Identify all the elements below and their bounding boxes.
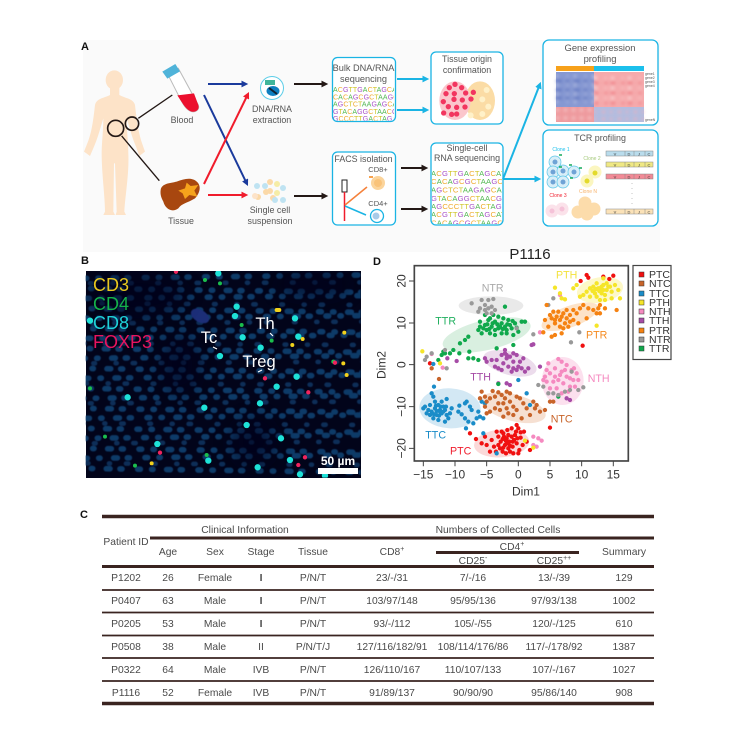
chart title: P1116	[509, 246, 551, 263]
icon: tissue cells	[439, 81, 495, 120]
panel: single-cell sequencing	[431, 143, 508, 228]
axes: −10	[394, 396, 408, 417]
row P0508: 38	[162, 642, 174, 653]
TCR segment labels: D	[628, 162, 631, 168]
label: tissue: Tissue	[168, 216, 194, 226]
label: extraction: extraction	[253, 115, 291, 125]
table header: Summary	[602, 547, 647, 558]
legend	[633, 266, 671, 360]
scatter plot	[375, 266, 628, 499]
TCR segment labels: C	[648, 152, 651, 156]
sequence text: ACGTTGACTAGCAT	[333, 87, 401, 94]
sequence text: CACAGCGCTAAGCT	[333, 94, 403, 101]
panel: single-cell sequencing: RNA sequencing	[434, 153, 500, 163]
NTC points	[432, 368, 553, 418]
sequence text: GTACAGGCTAACGC	[333, 109, 403, 116]
table header	[103, 525, 647, 567]
row P0322: 107/-/167	[532, 665, 576, 676]
TCR segment labels: D	[628, 152, 631, 156]
PTC points	[430, 275, 613, 453]
table header: CD8	[380, 547, 400, 558]
sequence text: AGCTCTAAGAGCAG	[431, 186, 508, 194]
channel legend: FOXP3	[93, 332, 152, 352]
axes: Dim1	[512, 485, 540, 499]
row P1202: 23/-/31	[376, 573, 408, 584]
arrows: to profiling	[503, 84, 540, 179]
legend: PTC	[649, 269, 670, 281]
clone N: Clone N	[579, 189, 597, 195]
TCR segment labels	[614, 152, 651, 214]
row P0508	[111, 642, 636, 653]
panel: gene expression profiling: profiling	[584, 53, 616, 64]
cluster labels: TTC	[425, 430, 446, 442]
cell labels: Tc	[201, 329, 217, 347]
channel legend: CD3	[93, 275, 129, 295]
cluster labels: NTR	[482, 282, 504, 294]
row P0322: Male	[204, 665, 226, 676]
label: suspension: suspension	[248, 216, 293, 226]
panel A letter: A	[81, 41, 89, 53]
cluster labels: PTR	[586, 330, 608, 342]
sequence text: ACGTTGACTAGCAT	[431, 210, 506, 219]
cluster labels: PTC	[450, 446, 472, 458]
panel: FACS isolation	[332, 152, 396, 225]
legend: TTC	[649, 288, 670, 300]
row P0322: 110/107/133	[445, 665, 502, 676]
scale bar	[318, 454, 358, 474]
row P1116: 52	[162, 688, 174, 699]
axes: 10	[394, 316, 408, 330]
axes: Dim2	[375, 351, 389, 379]
row P0322: P0322	[111, 665, 141, 676]
row P1116: 91/89/137	[369, 688, 415, 699]
panel: tissue origin confirmation	[431, 52, 503, 124]
panel D: tSNE scatter	[373, 246, 671, 499]
icon: blood tube	[162, 64, 199, 112]
TTC points	[423, 364, 530, 453]
row P0205: 610	[615, 619, 633, 630]
row P0407: P/N/T	[300, 596, 327, 607]
TCR segment labels: J	[638, 174, 640, 180]
row P1202: 26	[162, 573, 174, 584]
row P0508: Male	[204, 642, 226, 653]
row P1116: 90/90/90	[453, 688, 493, 699]
table header: +	[400, 546, 404, 553]
legend: PTH	[649, 297, 670, 309]
TCR segment labels: V	[614, 174, 617, 180]
TCR segment labels: V	[614, 210, 617, 214]
sequence text: ACGTTGACTAGCAT	[431, 169, 506, 178]
row P0205: I	[260, 619, 263, 630]
row P0407: 1002	[613, 596, 636, 607]
row P0205: P0205	[111, 619, 141, 630]
cluster labels: TTH	[470, 371, 491, 383]
row P1116	[112, 688, 633, 699]
clone 2: Clone 2	[583, 156, 601, 162]
row P0205: P/N/T	[300, 619, 327, 630]
row P0322: 126/110/167	[364, 665, 421, 676]
TTR points	[438, 307, 558, 397]
TCR segment labels: V	[614, 162, 617, 168]
row P0407: 95/95/136	[450, 596, 496, 607]
panel: TCR profiling: TCR profiling	[574, 133, 626, 143]
axes: −10	[445, 467, 465, 481]
channel legend: CD4	[93, 294, 129, 314]
row P1116: IVB	[253, 688, 269, 699]
sequence text: GCCCTTGACTAGA	[333, 116, 397, 123]
table header: CD25	[537, 556, 563, 567]
infographic	[80, 39, 672, 706]
table header: +	[520, 541, 524, 548]
table rules	[102, 516, 654, 704]
scale bar: 50 µm	[321, 454, 355, 468]
row P1116: 908	[615, 688, 633, 699]
panel: gene expression profiling	[543, 40, 658, 125]
panel: tissue origin confirmation: Tissue origin	[442, 54, 492, 64]
icon: single cell suspension	[252, 179, 286, 203]
table header: Age	[159, 547, 177, 558]
panel: single-cell sequencing: Single-cell	[447, 143, 487, 153]
cell labels	[201, 315, 276, 372]
row P0407: I	[260, 596, 263, 607]
row P0407: P0407	[111, 596, 141, 607]
axes: 10	[575, 467, 589, 481]
cluster labels: NTH	[588, 373, 610, 385]
TCR segment labels: C	[648, 210, 651, 214]
cluster ellipses	[418, 273, 625, 460]
row P0205: 93/-/112	[373, 619, 411, 630]
row P0407: 63	[162, 596, 174, 607]
label: suspension: Single cell	[250, 205, 290, 215]
panel A: workflow	[81, 39, 659, 227]
TCR segment labels: J	[638, 152, 640, 156]
channel legend	[93, 275, 152, 352]
microscopy cells	[75, 272, 363, 476]
row P0407: 97/93/138	[531, 596, 577, 607]
panel D letter: D	[373, 256, 381, 268]
PTH points	[422, 278, 620, 448]
legend: NTH	[649, 306, 671, 318]
row P1202: Female	[198, 573, 232, 584]
heatmap	[556, 72, 644, 122]
TCR segment labels: J	[638, 210, 640, 214]
row P1202: I	[260, 573, 263, 584]
darker tissue regions	[87, 272, 350, 465]
row P0205: Male	[204, 619, 226, 630]
icon: tissue	[161, 179, 200, 210]
table header: -	[485, 555, 488, 562]
sequence text: AGCTCTAAGAGCAG	[333, 102, 403, 109]
panel B: immunofluorescence image	[75, 255, 363, 478]
arrows: bulk to tissue origin	[397, 79, 427, 110]
table header: Stage	[248, 547, 275, 558]
TCR segment labels: D	[628, 210, 631, 214]
sequence text	[432, 171, 502, 224]
row P0205: 105/-/55	[454, 619, 492, 630]
panel B letter: B	[81, 255, 89, 267]
row P0508: 127/116/182/91	[357, 642, 428, 653]
panel C letter: C	[80, 509, 88, 521]
panel: FACS isolation: CD4+	[368, 199, 388, 208]
cell labels: Th	[255, 315, 275, 333]
row P0322: P/N/T	[300, 665, 327, 676]
panel: bulk sequencing: sequencing	[340, 74, 387, 84]
panel C: patient table	[80, 509, 654, 704]
gene labels	[645, 72, 656, 122]
table header: Sex	[206, 547, 225, 558]
row P0407: 103/97/148	[366, 596, 418, 607]
clone 3: Clone 3	[549, 193, 567, 199]
gene labels: gene2	[645, 76, 655, 80]
table header: CD25	[459, 556, 485, 567]
legend: PTR	[649, 325, 670, 337]
row P1116: Female	[198, 688, 232, 699]
axes	[375, 274, 620, 499]
row P1116: 95/86/140	[531, 688, 577, 699]
row P0407: Male	[204, 596, 226, 607]
PTR points	[543, 305, 617, 337]
cluster labels: NTC	[551, 414, 573, 426]
sequence text: GTACAGGCTAACGC	[431, 194, 508, 203]
panel: gene expression profiling: Gene expression	[565, 42, 635, 53]
row P0508: P/N/T/J	[296, 642, 330, 653]
table header: Tissue	[298, 547, 328, 558]
row P0322: 1027	[613, 665, 636, 676]
arrows: to sequencing	[294, 84, 426, 209]
axes: −5	[480, 467, 494, 481]
cluster labels	[425, 270, 610, 458]
table header: Patient ID	[103, 537, 149, 548]
row P1202: 129	[615, 573, 633, 584]
legend: TTR	[649, 343, 670, 355]
row P0508: P0508	[111, 642, 141, 653]
row P0508: 117/-/178/92	[525, 642, 583, 653]
panel: bulk sequencing	[332, 58, 403, 123]
label: extraction: DNA/RNA	[252, 104, 292, 114]
axes: −20	[394, 438, 408, 458]
cluster labels: TTR	[435, 315, 456, 327]
row P1116: P1116	[112, 688, 140, 699]
row P0407	[111, 596, 636, 607]
axes: 15	[607, 467, 620, 481]
TCR segment labels: C	[648, 162, 651, 168]
sequence text	[333, 87, 394, 120]
row P1202: P1202	[111, 573, 141, 584]
TCR segment labels: J	[638, 162, 640, 168]
label: blood: Blood	[171, 115, 193, 125]
axes: 5	[547, 467, 554, 481]
row P1116: P/N/T	[300, 688, 327, 699]
cluster labels: PTH	[556, 270, 577, 282]
row P0508: II	[258, 642, 264, 653]
table header: ++	[563, 555, 571, 562]
TTH points	[447, 344, 570, 400]
TCR segment labels: D	[628, 174, 631, 180]
TCR segment labels: V	[614, 152, 617, 156]
row P0322: 64	[162, 665, 174, 676]
NTR points	[425, 298, 583, 395]
cell labels: Treg	[242, 353, 276, 371]
gene labels: geneN	[645, 118, 656, 122]
row P0205: 120/-/125	[532, 619, 576, 630]
panel: tissue origin confirmation: confirmation	[443, 65, 491, 75]
legend: NTR	[649, 334, 671, 346]
axes: 0	[394, 361, 408, 368]
panel: FACS isolation: CD8+	[368, 165, 388, 174]
row P0205: 53	[162, 619, 174, 630]
TCR segment labels: C	[648, 174, 651, 180]
sequence text: CACAGCGCTAAGCT	[431, 177, 508, 186]
gene labels: gene3	[645, 80, 655, 84]
row P1202: P/N/T	[300, 573, 327, 584]
axes: −15	[413, 467, 434, 481]
panel: bulk sequencing: Bulk DNA/RNA	[333, 63, 394, 73]
legend: TTH	[649, 315, 669, 327]
row P0205	[111, 619, 633, 630]
row P1202: 7/-/16	[460, 573, 486, 584]
gene labels: gene4	[645, 84, 655, 88]
gene labels: gene1	[645, 72, 655, 76]
table header: Numbers of Collected Cells	[436, 525, 560, 536]
NTH points	[432, 295, 578, 447]
table header: Clinical Information	[201, 525, 289, 536]
axes: 0	[515, 467, 522, 481]
sequence text: AGCCCTTGACTAGC	[431, 202, 508, 211]
row P1202: 13/-/39	[538, 573, 570, 584]
channel legend: CD8	[93, 313, 129, 333]
row P0322: IVB	[253, 665, 269, 676]
panel: FACS isolation: FACS isolation	[334, 154, 393, 164]
row P0322	[111, 665, 636, 676]
row P1202	[111, 573, 633, 584]
row P0508: 1387	[613, 642, 636, 653]
panel: TCR profiling	[543, 130, 658, 226]
sequence text: CACAGCGCTAAGCT	[431, 218, 508, 228]
TCR sequence bars	[606, 151, 653, 214]
clone 1: Clone 1	[552, 147, 570, 153]
axes: 20	[394, 274, 408, 288]
icon: human body	[84, 70, 172, 215]
table header: CD4	[500, 542, 520, 553]
row P0508: 108/114/176/86	[438, 642, 509, 653]
icon: DNA/RNA extraction	[260, 76, 284, 100]
arrows: blood and tissue routes	[204, 84, 248, 195]
legend: NTC	[649, 278, 671, 290]
